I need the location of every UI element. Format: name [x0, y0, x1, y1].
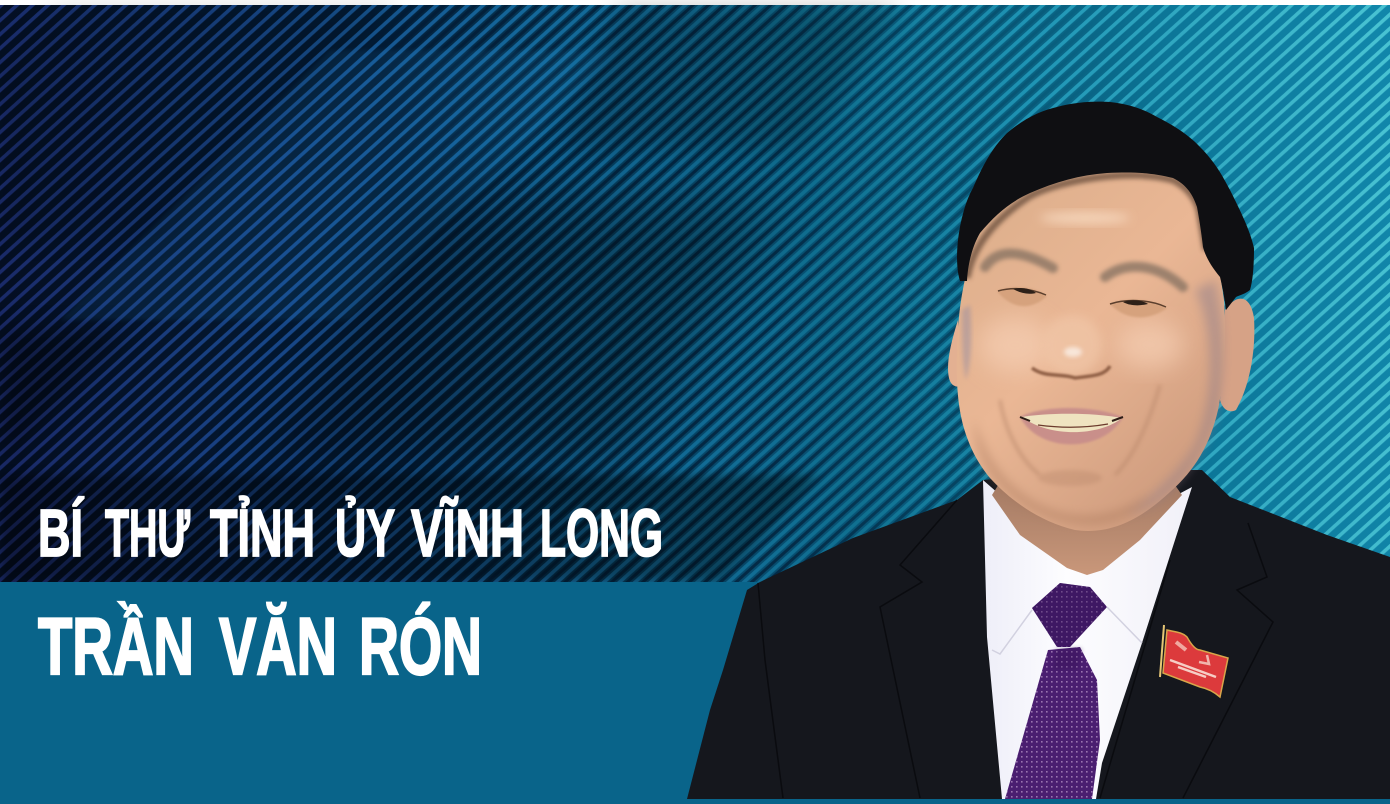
eyes	[997, 287, 1167, 317]
top white strip	[0, 0, 1390, 5]
subtitle: party position	[38, 496, 663, 571]
left ear	[948, 320, 962, 387]
smiling mouth	[1020, 408, 1123, 444]
subtitle: party position: ỦY	[335, 496, 395, 571]
shirt collar shading	[992, 607, 1142, 654]
subtitle: party position: VĨNH	[411, 496, 524, 571]
suit jacket	[687, 470, 1390, 799]
face shading	[962, 212, 1223, 524]
red flag pin	[1160, 625, 1228, 697]
purple tie	[1005, 583, 1107, 799]
subtitle: party position: THƯ	[105, 496, 190, 571]
subtitle: party position: TỈNH	[210, 496, 315, 571]
eyebrows	[985, 254, 1183, 287]
jacket lapels and seams	[758, 500, 1273, 798]
neck	[992, 450, 1182, 575]
title: name: VĂN	[219, 602, 337, 692]
portrait of Trần Văn Rón	[687, 102, 1390, 799]
nose	[1032, 315, 1110, 378]
bottom teal strip	[0, 799, 1390, 804]
title: name: RÓN	[359, 601, 482, 692]
teal title panel	[0, 582, 770, 804]
white shirt	[983, 480, 1192, 799]
title: name: TRẦN	[38, 601, 194, 692]
face	[957, 160, 1225, 531]
hair	[957, 102, 1254, 310]
subtitle: party position: BÍ	[38, 496, 85, 571]
right ear	[1220, 299, 1254, 411]
subtitle: party position: LONG	[540, 496, 663, 571]
title: name	[38, 601, 482, 692]
striped gradient background	[0, 0, 1390, 582]
